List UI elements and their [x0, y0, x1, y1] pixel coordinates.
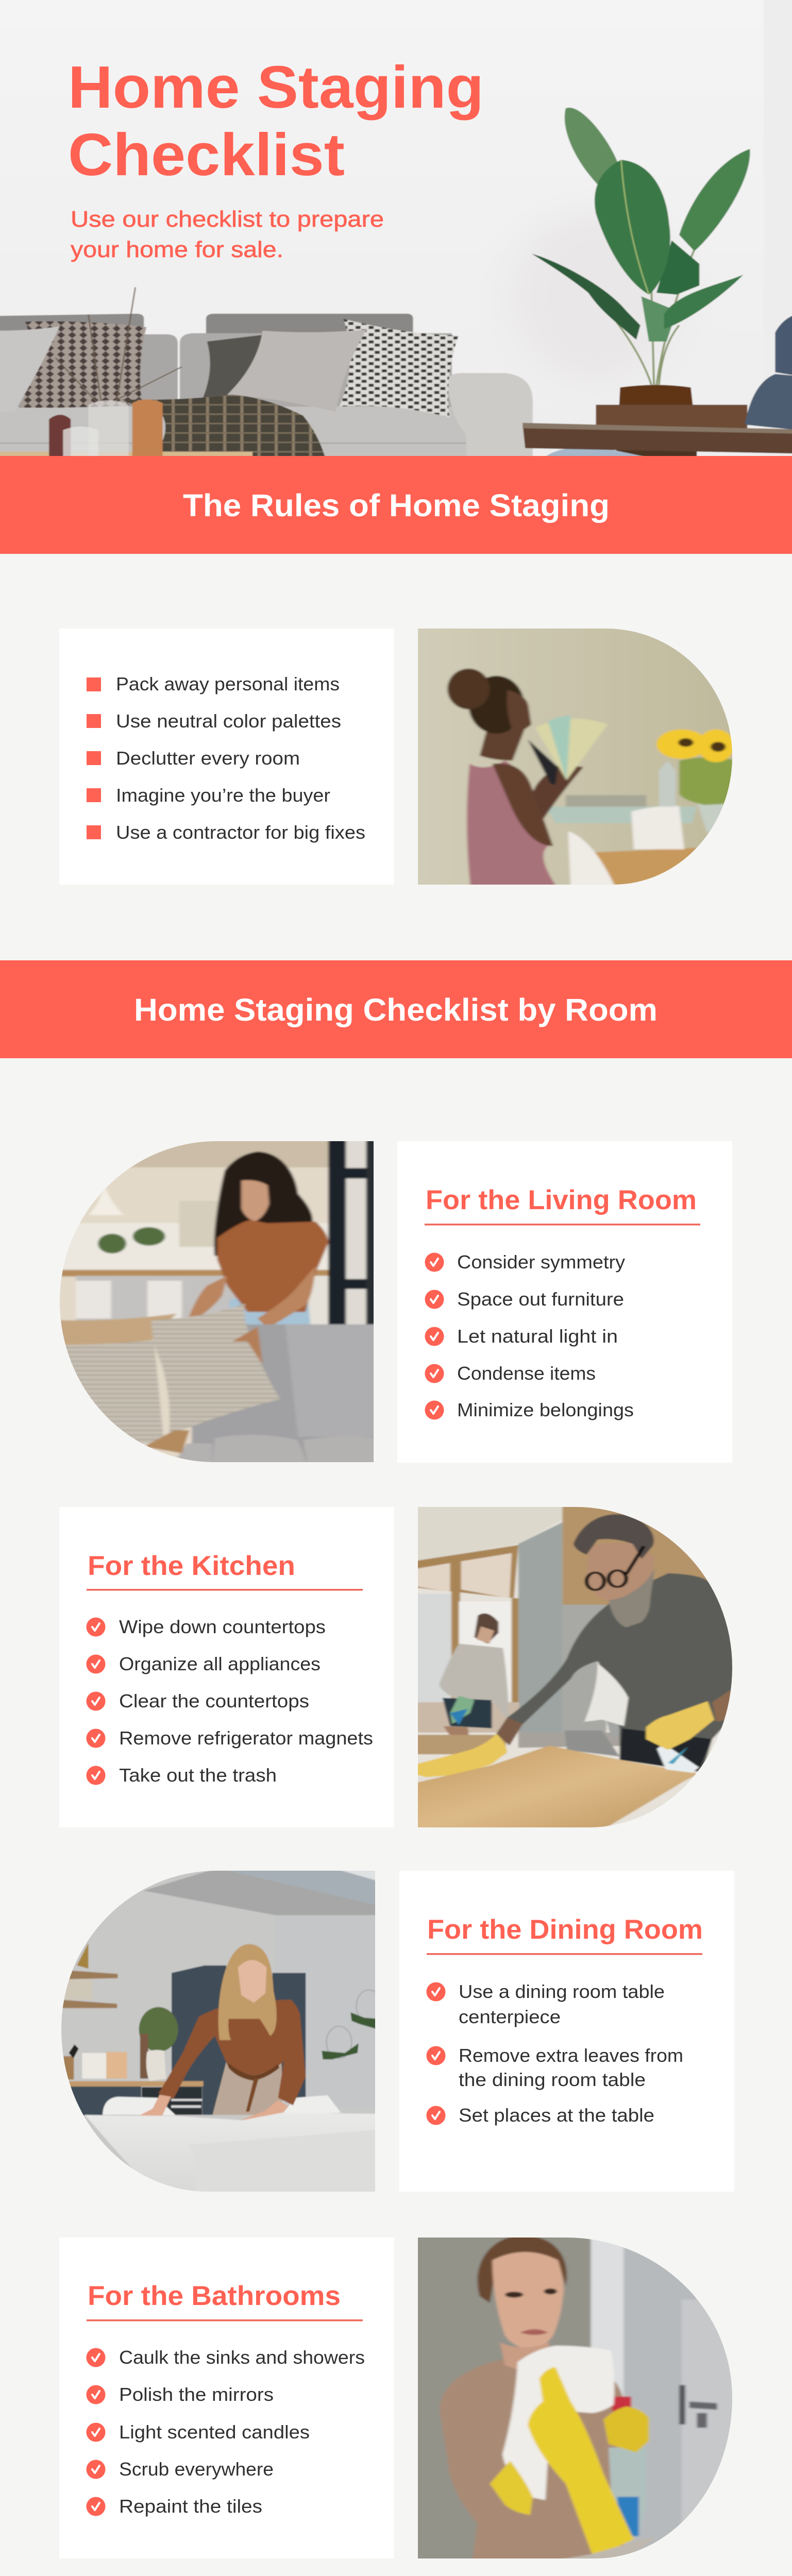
- hero photo: living room with sofa and plant: [0, 107, 792, 456]
- hero title: [68, 54, 484, 188]
- item: take out the trash: Take out the trash: [119, 1765, 277, 1786]
- banner: home staging checklist by room: [0, 960, 792, 1058]
- photo: woman with paint swatch fan: [418, 629, 732, 885]
- heading: for the dining room: For the Dining Room: [427, 1914, 703, 1945]
- banner: the rules of home staging: The Rules of Home Staging: [183, 488, 610, 523]
- hero title: Checklist: [68, 121, 345, 188]
- heading: for the living room: For the Living Room: [426, 1185, 697, 1215]
- item: use a dining room table centerpiece: [427, 1981, 665, 2027]
- banner: home staging checklist by room: Home Staging Checklist by Room: [134, 992, 658, 1027]
- item: remove extra leaves: the dining room table: [459, 2069, 646, 2090]
- item: caulk the sinks and showers: Caulk the sinks and showers: [119, 2347, 365, 2368]
- item: set places at the table: Set places at the table: [459, 2105, 654, 2126]
- photo: woman laying a dining tablecloth: [58, 1868, 382, 2195]
- item: repaint the tiles: Repaint the tiles: [119, 2496, 262, 2517]
- panel: rules list: [59, 629, 394, 885]
- item: let natural light in: Let natural light in: [457, 1326, 618, 1347]
- rule: pack away personal items: Pack away personal items: [116, 673, 340, 694]
- panel: for the living room: [397, 1141, 732, 1463]
- rule: use a contractor: Use a contractor for big fixes: [116, 822, 365, 843]
- hero title: Home Staging: [68, 54, 484, 121]
- photo: man and woman wiping a table: [408, 1503, 743, 1830]
- item: remove extra leaves: [427, 2045, 683, 2090]
- item: remove refrigerator magnets: Remove refrigerator magnets: [119, 1727, 373, 1749]
- rule: declutter every room: Declutter every room: [116, 748, 300, 769]
- heading: for the bathrooms: For the Bathrooms: [88, 2281, 341, 2311]
- item: use a dining room table centerpiece: centerpiece: [459, 2006, 561, 2027]
- rule: use neutral color palettes: Use neutral color palettes: [116, 710, 341, 732]
- photo: woman cleaning a bathroom mirror: [409, 2231, 743, 2563]
- rule: imagine you're the buyer: Imagine you’re the buyer: [116, 785, 330, 806]
- item: remove extra leaves: Remove extra leaves from: [459, 2045, 683, 2066]
- hero subtitle: [71, 207, 384, 262]
- item: polish the mirrors: Polish the mirrors: [119, 2384, 274, 2405]
- panel: for the kitchen: [59, 1507, 394, 1827]
- item: light scented candles: Light scented candles: [119, 2421, 310, 2443]
- item: wipe down countertops: Wipe down countertops: [119, 1616, 326, 1637]
- item: use a dining room table centerpiece: Use a dining room table: [459, 1981, 665, 2002]
- photo: living room, woman arranging pillow: [56, 1138, 379, 1466]
- item: consider symmetry: Consider symmetry: [457, 1251, 625, 1273]
- item: clear the countertops: Clear the countertops: [119, 1690, 309, 1711]
- hero subtitle: your home for sale.: [71, 237, 283, 262]
- item: organize all appliances: Organize all appliances: [119, 1653, 321, 1674]
- banner: the rules of home staging: [0, 456, 792, 554]
- hero subtitle: Use our checklist to prepare: [71, 207, 384, 232]
- item: space out furniture: Space out furniture: [457, 1289, 624, 1310]
- item: condense items: Condense items: [457, 1363, 596, 1384]
- item: scrub everywhere: Scrub everywhere: [119, 2459, 274, 2480]
- item: minimize belongings: Minimize belongings: [457, 1399, 634, 1420]
- panel: for the bathrooms: [59, 2238, 394, 2558]
- panel: for the dining room: [399, 1871, 734, 2192]
- heading: for the kitchen: For the Kitchen: [88, 1551, 295, 1581]
